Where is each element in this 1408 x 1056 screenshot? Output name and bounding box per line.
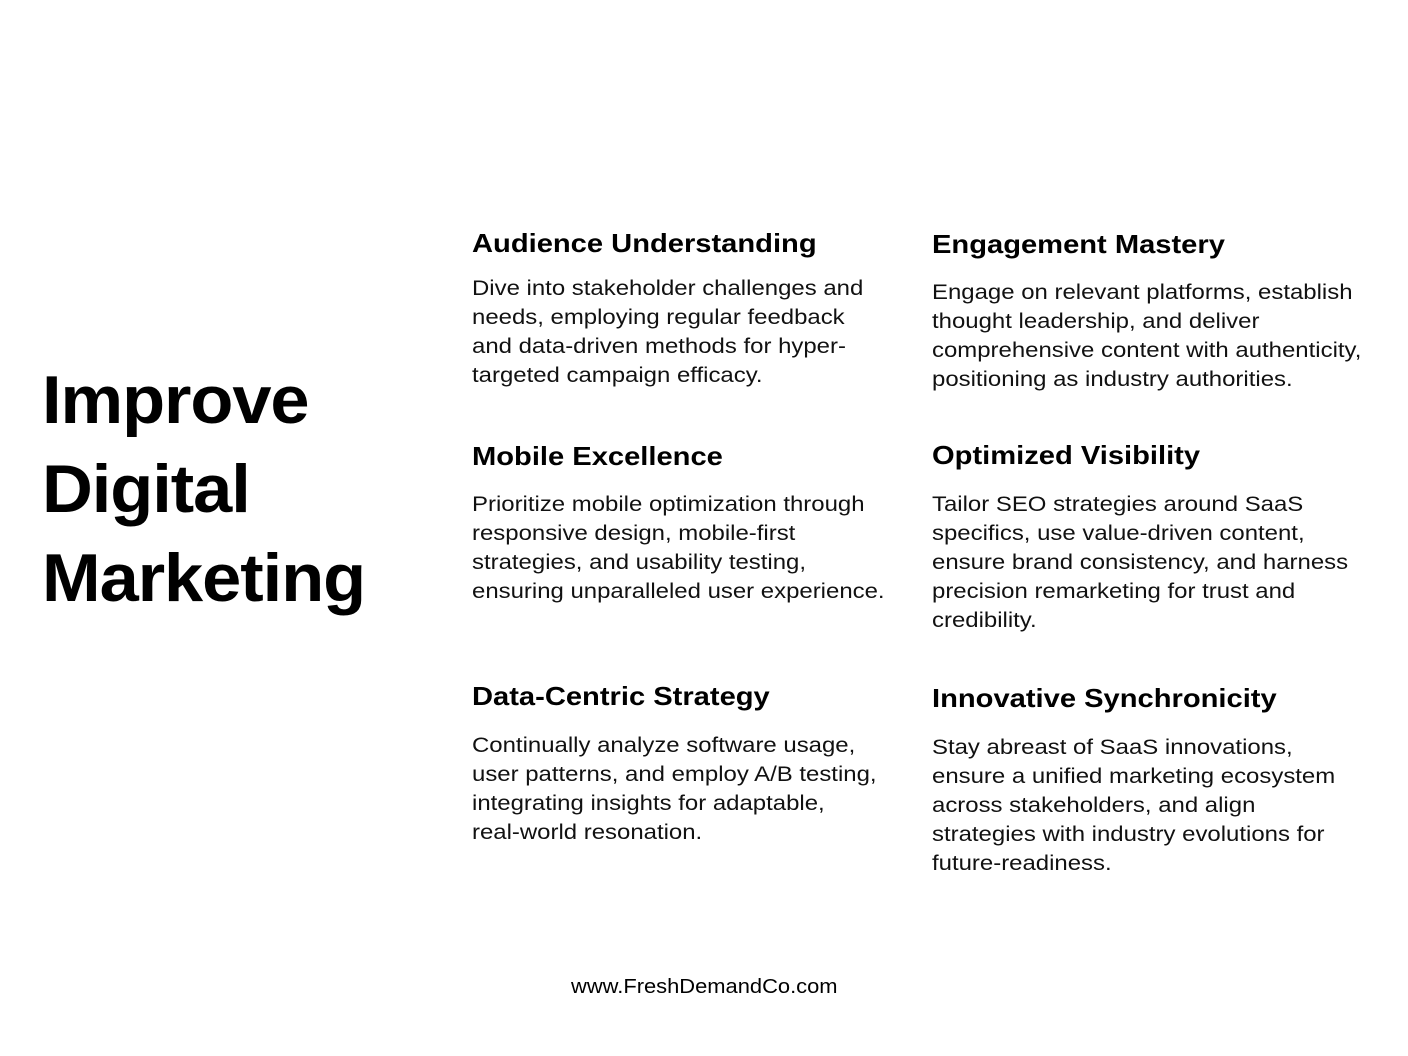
text: data-centric strategy: Continually analyze software usage, bbox=[472, 734, 855, 757]
text: mobile excellence bbox=[472, 493, 885, 603]
text: audience understanding: Dive into stakeholder challenges and bbox=[472, 277, 863, 300]
text: mobile excellence: ensuring unparalleled user experience. bbox=[472, 580, 885, 603]
title bbox=[42, 362, 365, 616]
text: optimized visibility: ensure brand consistency, and harness bbox=[932, 551, 1348, 574]
text: optimized visibility bbox=[932, 493, 1348, 632]
text: audience understanding bbox=[472, 277, 863, 387]
text: data-centric strategy: real-world resonation. bbox=[472, 821, 702, 844]
heading: innovative synchronicity: Innovative Synchronicity bbox=[932, 683, 1277, 713]
text: innovative synchronicity: Stay abreast of SaaS innovations, bbox=[932, 736, 1293, 759]
text: innovative synchronicity: ensure a unified marketing ecosystem bbox=[932, 765, 1335, 788]
title: Digital bbox=[42, 451, 250, 527]
text: audience understanding: and data-driven methods for hyper- bbox=[472, 335, 846, 358]
text: audience understanding: targeted campaign efficacy. bbox=[472, 364, 763, 387]
text: innovative synchronicity: strategies with industry evolutions for bbox=[932, 823, 1325, 846]
heading: data-centric strategy: Data-Centric Strategy bbox=[472, 681, 770, 711]
text: optimized visibility: credibility. bbox=[932, 609, 1037, 632]
heading: engagement mastery: Engagement Mastery bbox=[932, 229, 1225, 259]
title: Marketing bbox=[42, 540, 365, 616]
text: mobile excellence: responsive design, mobile-first bbox=[472, 522, 795, 545]
text: data-centric strategy: integrating insights for adaptable, bbox=[472, 792, 825, 815]
text: innovative synchronicity bbox=[932, 736, 1335, 875]
text: engagement mastery bbox=[932, 281, 1361, 391]
text: audience understanding: needs, employing regular feedback bbox=[472, 306, 845, 329]
title: Improve bbox=[42, 362, 309, 438]
heading: mobile excellence: Mobile Excellence bbox=[472, 441, 723, 471]
footer url: www.FreshDemandCo.com bbox=[571, 976, 838, 998]
heading: audience understanding: Audience Understanding bbox=[472, 228, 817, 258]
text: optimized visibility: Tailor SEO strategies around SaaS bbox=[932, 493, 1303, 516]
text: engagement mastery: comprehensive content with authenticity, bbox=[932, 339, 1361, 362]
text: engagement mastery: Engage on relevant platforms, establish bbox=[932, 281, 1353, 304]
text: innovative synchronicity: across stakeholders, and align bbox=[932, 794, 1255, 817]
text: optimized visibility: specifics, use value-driven content, bbox=[932, 522, 1305, 545]
text: optimized visibility: precision remarketing for trust and bbox=[932, 580, 1295, 603]
text: engagement mastery: thought leadership, and deliver bbox=[932, 310, 1259, 333]
text: engagement mastery: positioning as industry authorities. bbox=[932, 368, 1293, 391]
text: data-centric strategy: user patterns, and employ A/B testing, bbox=[472, 763, 877, 786]
text: mobile excellence: Prioritize mobile optimization through bbox=[472, 493, 865, 516]
text: mobile excellence: strategies, and usability testing, bbox=[472, 551, 806, 574]
text: data-centric strategy bbox=[472, 734, 877, 844]
heading: optimized visibility: Optimized Visibility bbox=[932, 440, 1200, 470]
text: innovative synchronicity: future-readiness. bbox=[932, 852, 1112, 875]
